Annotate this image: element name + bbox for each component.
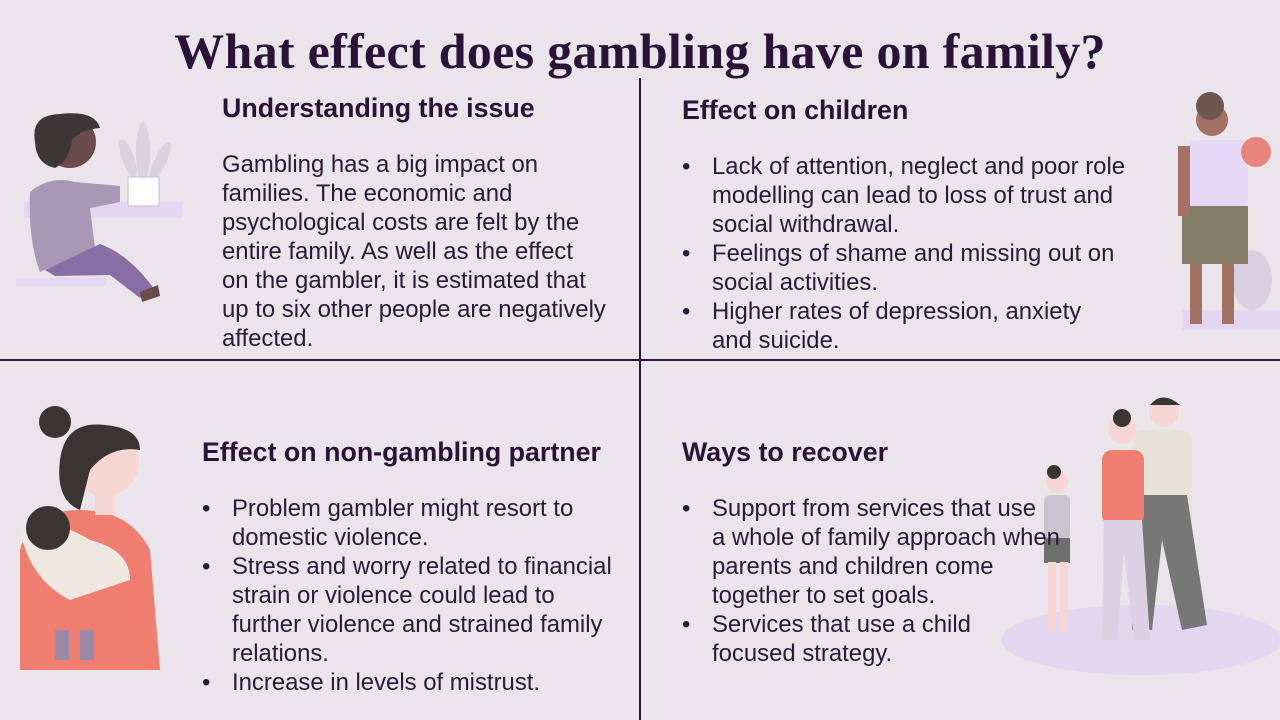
illustration: family xyxy=(1002,397,1280,675)
panel: effect on children xyxy=(682,92,1280,354)
horizontal divider xyxy=(0,359,1280,361)
bullet list: Increase in levels of mistrust. xyxy=(232,669,540,696)
title: What effect does gambling have on family? xyxy=(174,23,1106,79)
bullet list: further violence and strained family xyxy=(232,611,602,638)
bullet list: Feelings of shame and missing out on xyxy=(712,240,1114,267)
text block: affected. xyxy=(222,325,313,352)
heading: Effect on non-gambling partner xyxy=(202,437,601,467)
bullet list: strain or violence could lead to xyxy=(232,582,555,609)
bullet list: social withdrawal. xyxy=(712,211,899,238)
bullet list: a whole of family approach when xyxy=(712,524,1060,551)
panel: understanding xyxy=(16,93,606,352)
bullet list xyxy=(682,153,1125,354)
bullet list: modelling can lead to loss of trust and xyxy=(712,182,1113,209)
bullet list: Stress and worry related to financial xyxy=(232,553,612,580)
heading: Ways to recover xyxy=(682,437,888,467)
text block: entire family. As well as the effect xyxy=(222,238,573,265)
text block: Gambling has a big impact on xyxy=(222,151,538,178)
illustration: sitting person xyxy=(16,113,182,302)
bullet list: domestic violence. xyxy=(232,524,429,551)
bullet list xyxy=(682,495,1060,667)
vertical divider xyxy=(639,78,641,720)
illustration: mother with baby xyxy=(20,406,160,670)
panel: non-gambling partner xyxy=(20,406,612,696)
bullet list: relations. xyxy=(232,640,329,667)
bullet list: parents and children come xyxy=(712,553,994,580)
bullet list: together to set goals. xyxy=(712,582,935,609)
bullet list: Problem gambler might resort to xyxy=(232,495,573,522)
bullet list: Higher rates of depression, anxiety xyxy=(712,298,1081,325)
illustration: child with ball xyxy=(1178,92,1280,330)
text block xyxy=(222,151,606,352)
bullet list: focused strategy. xyxy=(712,640,892,667)
bullet list: Support from services that use xyxy=(712,495,1036,522)
text block: psychological costs are felt by the xyxy=(222,209,579,236)
bullet list: Services that use a child xyxy=(712,611,971,638)
bullet list: social activities. xyxy=(712,269,878,296)
text block: up to six other people are negatively xyxy=(222,296,606,323)
panel: ways to recover xyxy=(682,397,1280,675)
heading: Effect on children xyxy=(682,95,908,125)
text block: on the gambler, it is estimated that xyxy=(222,267,586,294)
bullet list xyxy=(202,495,612,696)
text block: families. The economic and xyxy=(222,180,512,207)
bullet list: and suicide. xyxy=(712,327,840,354)
bullet list: Lack of attention, neglect and poor role xyxy=(712,153,1125,180)
heading: Understanding the issue xyxy=(222,93,535,123)
